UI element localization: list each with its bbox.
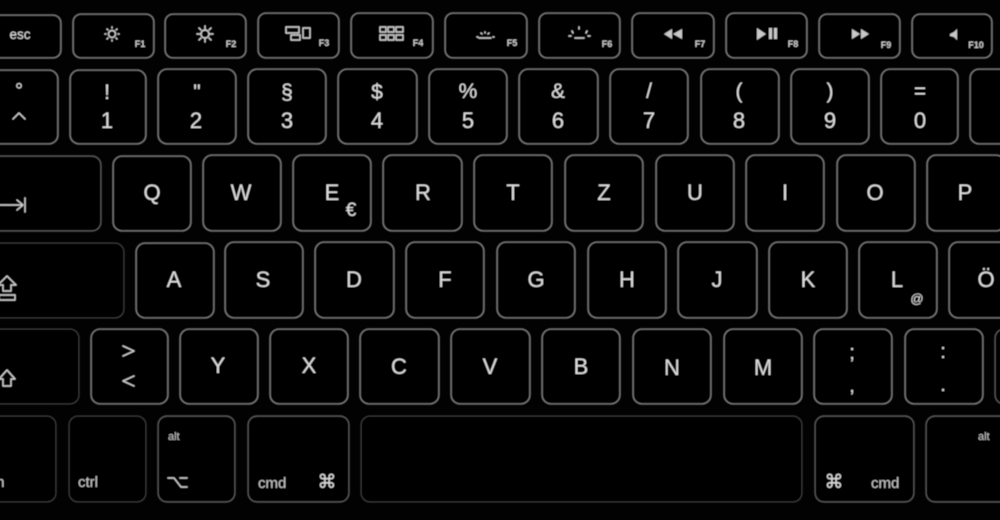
key: esc: esc	[9, 27, 31, 42]
key: F5	[445, 13, 527, 58]
key: right cmd	[815, 416, 914, 502]
key: F4: F4	[413, 38, 423, 48]
key: L	[859, 242, 937, 318]
key: J	[678, 242, 757, 318]
key: Ö	[949, 242, 1000, 318]
key: B	[542, 329, 620, 404]
key: colon	[905, 329, 983, 404]
key: U	[656, 155, 734, 231]
key: I	[746, 155, 824, 231]
key: T	[474, 155, 552, 231]
key: 7: /	[646, 80, 652, 103]
key: ctrl: ctrl	[78, 474, 98, 491]
key: 2	[158, 69, 236, 144]
key: right alt: alt	[978, 431, 990, 443]
key: 9: )	[826, 80, 834, 103]
key: 8	[701, 69, 779, 144]
key: 2: 2	[190, 108, 202, 133]
key: 7	[610, 69, 688, 144]
key: 4	[338, 69, 417, 144]
key: F9: F9	[881, 40, 891, 50]
key: tab	[0, 156, 101, 231]
key: Q	[113, 156, 191, 231]
key: D: D	[346, 267, 362, 292]
key: M	[724, 329, 802, 404]
key: colon: :	[940, 341, 946, 363]
key: partial right	[970, 69, 1000, 144]
key: 9	[791, 69, 869, 144]
key: 8: (	[736, 80, 742, 103]
key: 0: =	[914, 80, 926, 103]
YXCV key row	[0, 329, 1000, 404]
key: F7: F7	[695, 39, 705, 49]
key: V	[451, 329, 530, 404]
key: M: M	[754, 355, 772, 380]
key: I: I	[782, 180, 788, 205]
key: 2: "	[193, 81, 201, 104]
key: T: T	[506, 180, 520, 205]
key: F7	[632, 13, 714, 58]
key: Y: Y	[211, 353, 226, 378]
key: right alt	[926, 416, 1000, 502]
key: F10	[912, 14, 992, 58]
key: O: O	[866, 180, 884, 205]
bottom modifier row	[0, 416, 1000, 502]
key: E	[293, 155, 371, 231]
key: 5	[429, 69, 507, 144]
key: F8: F8	[788, 39, 798, 49]
key: caps lock	[0, 243, 124, 318]
key: E: €	[346, 200, 357, 221]
key: 3	[248, 69, 326, 144]
key: 1: 1	[101, 108, 113, 133]
key: colon: .	[940, 374, 946, 396]
key: L: L	[891, 267, 903, 292]
key: R: R	[415, 180, 431, 205]
key: F5: F5	[507, 38, 517, 48]
key: O	[837, 155, 915, 231]
key: W	[203, 155, 281, 231]
key: P: P	[958, 180, 972, 205]
key: Ö: Ö	[977, 267, 995, 292]
key: F1: F1	[135, 39, 145, 49]
key: right cmd: ⌘	[824, 471, 844, 493]
key: 0	[881, 69, 958, 144]
key: A: A	[167, 267, 182, 292]
key: F3	[258, 13, 339, 58]
key: fn	[0, 416, 56, 502]
key: 5: %	[459, 80, 477, 103]
key: F2: F2	[226, 39, 236, 49]
key: right shift	[995, 329, 1000, 404]
number key row	[0, 69, 1000, 144]
key: F10: F10	[968, 40, 984, 50]
key: Z	[565, 155, 643, 231]
key: Z: Z	[597, 180, 611, 205]
key: semicolon: ;	[849, 342, 855, 364]
key: P	[927, 155, 1000, 231]
key: left shift	[0, 329, 79, 404]
key: 7: 7	[643, 108, 655, 133]
key: F3: F3	[319, 38, 329, 48]
key: R	[383, 155, 462, 231]
key: D	[315, 242, 394, 318]
key: X	[270, 329, 348, 404]
key: right cmd: cmd	[871, 475, 899, 492]
key: left cmd	[248, 416, 349, 502]
key: 5: 5	[462, 108, 474, 133]
key: space bar	[361, 416, 802, 502]
key: left cmd: ⌘	[318, 471, 336, 493]
key: H	[588, 242, 666, 318]
key: K	[769, 242, 847, 318]
key: N: N	[664, 355, 680, 380]
key: F: F	[438, 267, 452, 292]
key: L: @	[910, 291, 924, 306]
key: semicolon: ,	[849, 375, 855, 397]
key: caret: °	[15, 80, 23, 102]
key: F2	[165, 14, 246, 58]
key: esc	[0, 15, 61, 58]
ASDF key row	[0, 242, 1000, 318]
key: J: J	[712, 267, 722, 292]
key: caret	[0, 70, 58, 144]
key: H: H	[619, 267, 635, 292]
key: N	[633, 329, 711, 404]
key: Y	[180, 329, 258, 404]
key: S	[225, 242, 303, 318]
key: semicolon	[814, 329, 892, 404]
QWERTZ key row	[0, 155, 1000, 231]
key: left alt	[158, 416, 235, 502]
key: S: S	[256, 267, 270, 292]
key: F8	[726, 13, 807, 58]
key: C: C	[391, 354, 407, 379]
key: V: V	[483, 354, 498, 379]
key: C	[360, 329, 439, 404]
key: G: G	[527, 267, 545, 292]
key: angle brackets	[91, 329, 168, 404]
key: F6	[539, 13, 620, 58]
function key row	[0, 13, 992, 58]
key: F1	[73, 14, 154, 58]
key: B: B	[574, 354, 588, 379]
key: 4: 4	[371, 108, 383, 133]
key: 3: 3	[281, 108, 293, 133]
key: U: U	[687, 180, 703, 205]
key: 3: §	[281, 81, 293, 104]
key: X: X	[302, 353, 317, 378]
key: ctrl	[69, 416, 146, 502]
key: W: W	[231, 180, 252, 205]
key: G	[497, 242, 575, 318]
key: 4: $	[371, 81, 383, 104]
key: 9: 9	[824, 108, 836, 133]
key: 0: 0	[914, 108, 926, 133]
key: 1: !	[104, 81, 110, 104]
key: 8: 8	[733, 108, 745, 133]
key: left cmd: cmd	[258, 475, 286, 492]
key: E: E	[325, 180, 339, 205]
key: 6: 6	[552, 108, 564, 133]
key: A	[136, 243, 214, 318]
key: F9	[819, 14, 900, 58]
key: left alt: alt	[168, 431, 180, 443]
key: Q: Q	[143, 180, 161, 205]
key: K: K	[801, 267, 816, 292]
key: 6	[519, 69, 598, 144]
key: F6: F6	[602, 39, 612, 49]
key: F	[406, 242, 484, 318]
key: 6: &	[551, 80, 565, 103]
key: 1	[70, 70, 146, 144]
key: F4	[351, 13, 433, 58]
